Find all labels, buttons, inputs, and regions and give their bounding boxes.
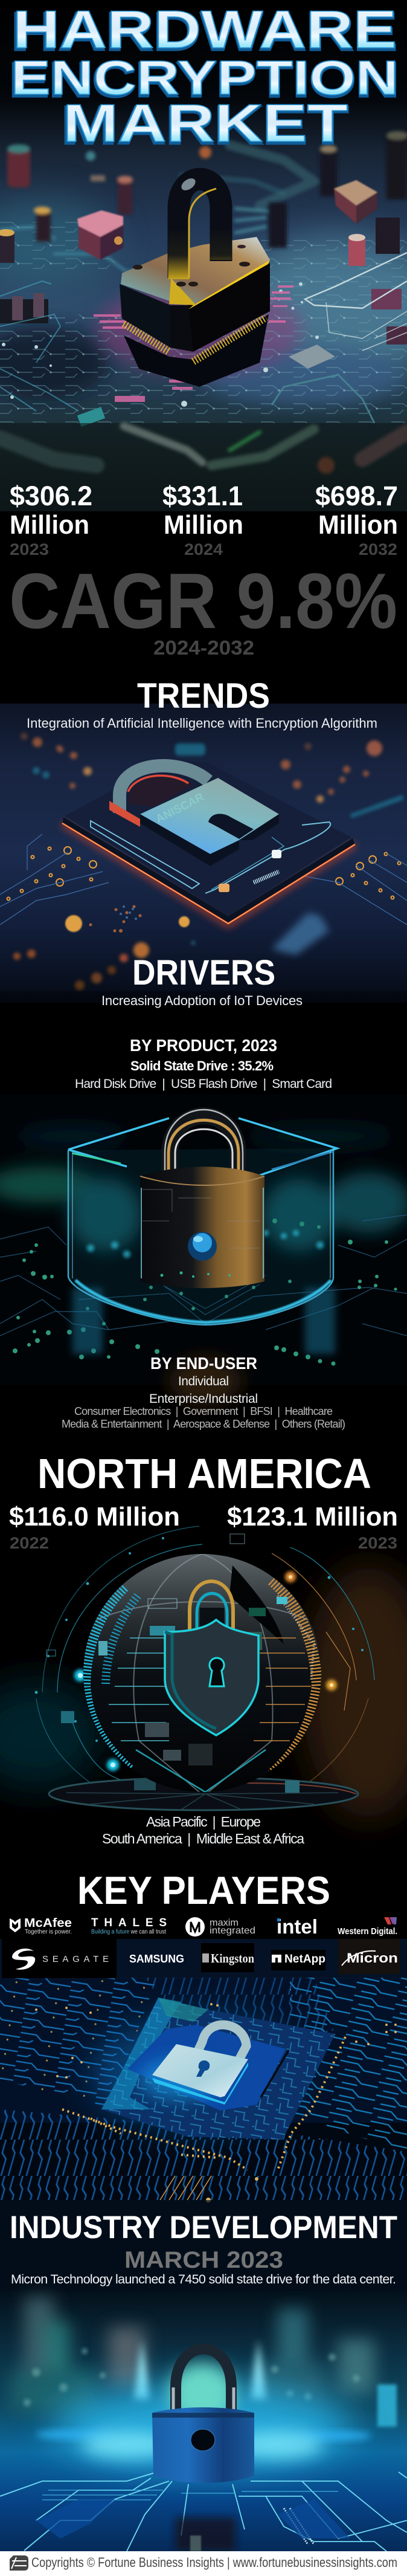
stat: 2023 value [10, 481, 92, 558]
right bright tower [377, 2384, 397, 2427]
end-user: enterprise: Enterprise/Industrial [149, 1392, 258, 1406]
globe meridians [97, 1554, 308, 1792]
blurred skyline [12, 2297, 374, 2412]
hero background [0, 0, 407, 511]
blue background [0, 2291, 407, 2551]
blurred orange bokeh [21, 733, 382, 803]
panel: trends image [0, 658, 407, 1003]
white bright circuit trace [305, 253, 407, 308]
outer chip [101, 1998, 335, 2140]
inner data panels [109, 1638, 175, 1741]
blurred traces [0, 145, 314, 272]
blurred lower shapes [272, 913, 329, 955]
product segments: Hard Disk Drive | USB Flash Drive | Smart Card [75, 1077, 332, 1091]
circuit lines [0, 1215, 407, 1336]
year 2022: 2022 [10, 1534, 49, 1552]
logos row 1 [10, 1915, 397, 1938]
base disc [49, 1778, 358, 1810]
glass box [68, 1118, 337, 1325]
title line 3: MARKET [61, 95, 348, 156]
title line 3: MARKET [63, 93, 348, 153]
stat: 2024 value: $331.1 [162, 481, 243, 511]
panel: blue padlock on glowing circuit [0, 2291, 407, 2551]
logo: Kingston: Kingston [211, 1951, 254, 1966]
lock plate [140, 778, 279, 854]
padlock shadow [124, 314, 269, 387]
circuit background [0, 1939, 407, 2296]
background glow [0, 1095, 407, 1385]
padlock body [140, 1167, 264, 1288]
keyhole [210, 1658, 224, 1686]
padlock blue base [152, 2062, 248, 2105]
padlock shackle [176, 2349, 231, 2415]
footer background [0, 2551, 407, 2576]
leading product share: Solid State Drive : 35.2% [130, 1058, 274, 1073]
footer bar [0, 2551, 407, 2576]
other regions line 2: South America | Middle East & Africa [102, 1831, 304, 1846]
logo: NetApp: NetApp [284, 1953, 325, 1966]
industrial segments line 2: Media & Entertainment | Aerospace & Defense | Others (Retail) [62, 1418, 345, 1430]
padlock body [152, 2044, 248, 2097]
logo: Western Digital [338, 1917, 397, 1937]
logo: Western Digital: Western Digital. [338, 1926, 397, 1937]
date: March 2023: MARCH 2023 [124, 2247, 283, 2273]
title line 1: HARDWARE [11, 2, 397, 62]
fade to black at bottom and top [0, 423, 407, 511]
logo: Kingston [201, 1943, 254, 1972]
right module outline [205, 822, 330, 893]
CAGR period: 2024-2032 [153, 636, 254, 659]
platform device [0, 658, 355, 925]
end-user: individual: Individual [178, 1374, 229, 1388]
logo: Thales: THALES [91, 1917, 167, 1929]
body left face [120, 284, 170, 348]
glowing circuit lines [0, 2472, 407, 2551]
logo: Intel: intel [277, 1915, 318, 1938]
stat: 2024 value [162, 481, 243, 558]
trends background [0, 704, 407, 1003]
logo: Maxim Integrated: maxim [210, 1918, 239, 1928]
circuit dots left and right [7, 847, 401, 901]
logo: Micron [338, 1939, 400, 1974]
light spires [134, 2339, 266, 2400]
platform glow [62, 823, 355, 925]
pink chip right [334, 180, 377, 224]
development description: Micron Technology launched a 7450 solid state drive for the data center. [11, 2272, 396, 2286]
heading: key players: KEY PLAYERS [77, 1868, 330, 1912]
logo: Thales: Building a future we can all trust [91, 1929, 166, 1935]
lower shield vee [136, 1750, 266, 1792]
top plate [121, 237, 270, 305]
blurred foreground traces [0, 426, 407, 474]
warm and cool background glow [0, 1565, 407, 1819]
left module [91, 821, 199, 888]
panel: hero circuit board with padlock [0, 0, 407, 511]
stat: 2024 value: 2024 [184, 540, 223, 558]
lock shackle [190, 1581, 233, 1632]
logo: Seagate: SEAGATE [42, 1954, 109, 1964]
body right face [187, 263, 270, 352]
green dots [13, 1218, 397, 1366]
padlock [120, 176, 270, 387]
heading: trends: TRENDS [137, 676, 270, 716]
slot line [261, 2050, 289, 2097]
logo: McAfee: Together is power. [25, 1929, 72, 1935]
blue padlock [152, 2349, 254, 2483]
amber light chains [62, 2037, 345, 2170]
blurred components [7, 131, 407, 248]
title line 2: ENCRYPTION [11, 51, 399, 105]
padlock shackle [179, 179, 221, 278]
industrial segments line 1: Consumer Electronics | Government | BFSI | Healthcare [74, 1405, 333, 1417]
fade to black [0, 991, 407, 1003]
logo: Samsung: SAMSUNG [129, 1953, 184, 1965]
stat: 2024 value: Million [164, 510, 243, 540]
stat: 2023 value: Million [10, 510, 89, 540]
logos row 2 [2, 1939, 400, 1978]
stat: 2032 value: 2032 [359, 540, 397, 558]
logo: McAfee [10, 1917, 72, 1935]
panel: circuit board with pale padlock [0, 1939, 407, 2297]
north america 2023 value: $123.1 Million [227, 1502, 398, 1532]
trace patterns [0, 1978, 407, 2200]
keyhole [196, 2060, 210, 2077]
glowing nodes [285, 1571, 296, 1582]
logo: Maxim Integrated: integrated [210, 1926, 255, 1936]
year 2023: 2023 [358, 1534, 397, 1552]
keyhole dome [188, 1232, 217, 1261]
orange edge [62, 823, 355, 924]
panel: glass box padlock image [0, 1095, 407, 1405]
title: Hardware Encryption Market [9, 0, 399, 156]
stat: 2023 value: $306.2 [10, 481, 92, 511]
heading: drivers: DRIVERS [132, 953, 275, 992]
padlock shackle [170, 1116, 238, 1188]
cylinders [348, 237, 365, 266]
panel: globe shield image [0, 1526, 407, 1819]
light beams under box [72, 1287, 335, 1354]
other regions line 1: Asia Pacific | Europe [146, 1814, 261, 1830]
central glow [51, 2384, 353, 2469]
logo: Micron: Micron [347, 1950, 398, 1966]
circular data arcs [36, 1526, 374, 1783]
shackle [120, 766, 208, 813]
by product heading: BY PRODUCT, 2023 [130, 1036, 277, 1055]
Fortune Business Insights logo [10, 2555, 28, 2571]
logo: McAfee: McAfee [24, 1917, 72, 1930]
lower dark fade [0, 2200, 407, 2297]
pink pads [94, 285, 293, 402]
bokeh lights [24, 2348, 360, 2406]
title line 1: HARDWARE [13, 0, 397, 59]
platform top [65, 760, 351, 916]
trends description: Integration of Artificial Intelligence with Encryption Algorithm [27, 716, 377, 731]
inner blue plate [127, 2025, 286, 2111]
pale padlock [152, 2025, 248, 2105]
logo: Seagate [2, 1939, 117, 1978]
platform device: ANISCAR [154, 791, 207, 826]
stat: 2032 value [315, 481, 398, 558]
left cyan data dots [85, 1587, 130, 1771]
stat: 2032 value: $698.7 [315, 481, 398, 511]
glow around chip [91, 2019, 296, 2128]
pink chip left [77, 210, 123, 260]
lock and shield [165, 1581, 258, 1735]
left trace block [0, 281, 79, 411]
logo: NetApp [271, 1950, 325, 1970]
globe [83, 1554, 321, 1792]
drivers description: Increasing Adoption of IoT Devices [101, 993, 303, 1008]
padlock body [152, 2407, 254, 2483]
stat: 2023 value: 2023 [10, 540, 49, 558]
north america 2022 value: $116.0 Million [9, 1502, 180, 1532]
faint band behind logos [0, 1939, 407, 1979]
right orange data dots [272, 1581, 317, 1774]
heading: north america: NORTH AMERICA [37, 1450, 371, 1497]
padlock shackle [197, 2025, 246, 2064]
stat: 2032 value: Million [318, 510, 398, 540]
logo: Thales [91, 1917, 167, 1935]
padlock [140, 1110, 264, 1288]
platform skirt [62, 817, 355, 925]
shield [165, 1620, 258, 1735]
keyhole [191, 2429, 215, 2451]
by end-user heading: BY END-USER [150, 1354, 257, 1373]
title line 2: ENCRYPTION [9, 53, 399, 108]
logo: Maxim Integrated [185, 1917, 255, 1937]
plate notch [208, 814, 254, 839]
chip pins [124, 317, 266, 361]
arc nodes [35, 1537, 364, 1742]
